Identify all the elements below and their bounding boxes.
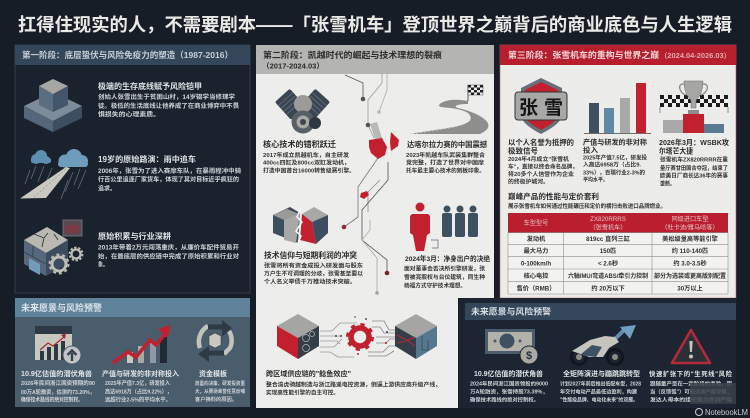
comparison table: 发动机 [527,235,546,243]
item: full matrix: "性能级品牌、电动化未来"的双雁。 [560,396,638,404]
item: belief versus profit: 张雪将所有资金成投入研发面与股东 [264,262,363,270]
item: walking away: 面对董事会否决所引擎研发，张 [404,264,485,272]
icon: rain and road [20,149,88,199]
table heading: 展示张雪机车如何通过性能碾压和定价的横扫击败进口品牌燃业。 [508,202,666,210]
item: personal reputation: 车"，直接以终会命名品牌， [508,162,578,170]
item: rain chase: 追求。 [98,184,116,192]
item: early accumulation: 始，在最底层的供应链中完成了原始积累和行业对 [98,252,239,260]
item: output and research: 产值与研发的非对称投入 [102,369,179,378]
stage three header [500,45,736,65]
comparison table: （张雪机车） [589,224,627,232]
item: capital template [195,369,245,403]
comparison table: 车型型号 [524,219,548,227]
item: asymmetric investment: 33%），百瑞行业2-3%的 [583,168,645,176]
item: core technology [263,139,355,174]
icon: motorcycle and arrow [572,325,636,364]
item: personal reputation: 的终极护城河。 [508,178,549,186]
icon: stacked block [24,79,82,132]
comparison table: 30万以上 [677,284,703,292]
item: core technology: 400cc四缸及800cc双缸发动机， [263,158,350,166]
item: core technology: 2017年成立凯越机车，自主研发 [263,151,349,159]
item: WSBK victory: 尔塔芒大捷 [659,146,693,156]
left vision header [15,298,250,317]
icon: red fragments [360,122,399,199]
panel: stage one [15,45,250,293]
item: core technology: 核心技术的错积跃迁 [263,139,336,149]
item: full matrix: 年交付电动产品最低边盈利，构建 [560,388,638,396]
item: output and research: 2025年产值7.3亿，研发投入 [105,379,170,387]
item: personal reputation: 2024年4月成立"张雪机 [508,155,569,163]
item: dakar: 达喀尔拉力赛的中国震撼 [407,140,488,149]
item: WSBK victory: 垄断。 [660,180,675,188]
icon: cycle arrows [198,320,232,362]
item: early accumulation [98,231,239,268]
item: walking away: 杨福方式守护技术理想。 [404,282,466,290]
comparison table [508,213,728,294]
icon: supply chain cubes and gear [277,314,437,359]
stage two header [256,45,494,74]
comparison table: 同级进口车型 [671,215,709,223]
comparison table: 售价（RMB） [517,284,555,292]
comparison table: 六轴IMU/弯道ABS/牵引力控制 [568,272,648,280]
panel: stage three [500,45,736,298]
item: valuation, right [470,369,548,404]
item: belief versus profit: 万户生不可调理的分歧，张雪甚至要以 [264,270,363,278]
item: survival baseline [98,81,240,118]
comparison table: < 2.6秒 [598,260,618,268]
item: asymmetric investment: 入高达6958万（占比9. [583,160,641,168]
item: output and research: 远超行业2-5%的平均水平。 [105,396,171,404]
stage one header: 第一阶段：底层蛰伏与风险免疫力的塑造（1987-2016） [22,50,233,60]
icon: v-twin engine [275,89,330,134]
stage three header: 第三阶段：张雪机车的重构与世界之巅 [508,50,660,60]
item: valuation: 确保技术路线的绝对控制权。 [21,396,83,404]
right vision header: 未来愿景与风险预警 [471,306,551,316]
item: WSBK victory: 张雪机车ZX820RRRR在重 [660,156,728,164]
item: output and research [102,369,179,404]
stage one header [15,45,250,65]
comparison table: 150匹 [600,248,616,255]
item: personal reputation [508,138,578,186]
stage two header: 第二阶段：凯越时代的崛起与技术理想的裂痕 [263,50,443,60]
item: full matrix: 计划2027年前后推出低配车型，2028 [560,380,641,388]
item: lifeline risk: 当（反馈弧"）可能造成产能受限， [650,388,732,396]
item: rain chase: 行百公里追逐厂家货车，体现了其对目标近乎疯狂的 [98,176,239,184]
item: personal reputation: 以个人名誉为抵押的 [508,138,574,147]
item: WSBK victory: 欧美日厂商长达36年的赛事 [660,172,728,180]
comparison table: ZX820RRRS [590,216,626,223]
comparison table: 核心电控 [524,272,549,280]
icon: name shield [515,78,567,134]
item: WSBK victory: 量厅赛甘田国合夺冠，结束了 [660,164,728,172]
item: asymmetric investment: 平均水平。 [583,176,608,184]
item: full matrix [560,369,641,404]
item: rain chase [98,154,241,192]
item: personal reputation: 极致信号 [508,146,538,156]
item: valuation, right: 万A轮融资，张雪持股73.39%， [470,388,548,396]
title: 扛得住现实的人，不需要剧本——「张雪机车」登顶世界之巅背后的商业底色与人生逻辑 [18,14,732,35]
item: valuation: 2026年民间浙江国资预期的90 [21,379,95,387]
item: catfish effect: 跨区域供应链的"鲶鱼效应" [266,369,351,378]
icon: warning triangle [672,330,710,363]
icon: growth chart window [35,326,81,364]
item: survival baseline: 徒。极低的生活底线让他养成了在商业博弈中不畏 [98,102,240,110]
stage two header: （2017-2024.03） [262,62,324,70]
item: valuation: 10.9亿估值的潜伏角兽 [21,369,92,378]
item: capital template: 放量的决策、研发投资重 [195,380,245,387]
blurred patch [690,383,736,404]
item: belief versus profit [264,250,363,286]
item: belief versus profit: 技术信仰与短期利润的冲突 [264,250,357,260]
table heading: 巅峰产品的性能与定价套利 [508,191,599,201]
item: valuation, right: 10.9亿估值的潜伏角兽 [474,369,543,378]
item: lifeline risk [649,369,733,404]
item: catfish effect: 整合渝虎骑越制造与浙江路遥电控资源，倒逼上游供应商升级产线， [266,380,441,388]
item: rain chase: 19岁的原始路演：雨中追车 [98,154,196,164]
item: lifeline risk: 快速扩张下的"生死线"风险 [649,369,733,378]
icon: trophy on podium [660,81,728,133]
icon: checkered flag and road [410,85,488,134]
icon: banknote and coin: $ [526,350,532,362]
icon: rising red arrow [113,325,170,363]
item: early accumulation: 象。 [98,260,108,268]
comparison table: 美松级量高等能引擎 [662,235,718,243]
item: core technology: 打造中国首台16000转售级赛引擎。 [263,166,355,174]
item: output and research: 高达6918万（占比9.22%）， [105,388,172,396]
comparison table: 约 110-140匹 [672,247,708,255]
item: early accumulation: 原始积累与行业深耕 [98,231,171,241]
item: rain chase: 2006年，张雪为了进入赛摩车队，在暴雨程冲中骑 [98,167,241,175]
item: lifeline risk: 发达人母本的组织能力受到严峻 [650,396,733,404]
item: full matrix: 全矩阵演进与蹦跳跳转型 [563,369,640,378]
item: survival baseline: 创始人张雪出生于贫困山村，14岁辍学当修理学 [98,93,235,101]
item: walking away [404,254,490,290]
item: survival baseline: 极端的生存底线赋予风险铠甲 [98,81,202,91]
panel: vision and risk, left [15,298,250,407]
item: capital template: 大，从赛场荣誉任意反哺 [195,388,245,395]
comparison table: （杜卡迪/雅马哈等） [661,224,719,232]
comparison table: 最大马力 [524,247,548,255]
item: valuation: 00万A轮融资，估测约73.20%， [21,388,95,396]
table heading [508,191,666,210]
item: walking away: 2024年3月：净身出户的决绝 [405,254,490,263]
right vision header [465,303,736,320]
left vision header: 未来愿景与风险预警 [21,302,102,313]
icon: name shield: 张 雪 [519,97,563,119]
circuit lines [342,73,389,295]
item: lifeline risk: 跟随量产是在一定阶段的考验，因 [650,380,732,388]
icon: split cube [273,207,328,244]
comparison table: 819cc 直列三缸 [586,235,630,243]
item: catfish effect [266,369,441,396]
item: capital template: 资金模板 [199,369,227,378]
comparison table: 部分为选装或更高版别配置 [654,272,726,280]
item: dakar: 托车最主要心技术的刻板印象。 [406,166,485,174]
icon: red person and board group [410,202,478,251]
item: dakar: 竞完整，打造了世界对中国摩 [406,158,484,166]
panel: vision and risk, right [459,298,736,408]
item: catfish effect: 实现高性能引擎的自主可控。 [266,388,339,396]
comparison table: 约 20万以下 [591,284,625,292]
panel: stage two [256,45,494,408]
item: valuation [21,369,95,404]
stage three header: （2024.04-2026.03） [660,52,731,60]
item: WSBK victory: 2026年3月：WSBK攻 [659,138,730,147]
item: personal reputation: 将20多个人信誉作为企业 [508,170,574,178]
item: asymmetric investment: 产值与研发的非对称 [583,138,647,146]
item: valuation, right: 2024年民间浙江国资领投的9000 [470,380,548,388]
item: dakar: 2023年凯越车队武装集群整合 [406,151,485,159]
item: WSBK victory [659,138,730,188]
comparison table: 0-100km/h [521,260,551,268]
comparison table: 约 3.0-3.5秒 [673,260,707,268]
item: asymmetric investment: 2025年产值7.5亿，研发投 [583,154,647,162]
item: valuation, right: 确保技术路线的绝对控制权。 [470,396,539,404]
bar chart: output and research [584,83,651,134]
item: survival baseline: 惧损失的心理素质。 [98,110,160,118]
item: asymmetric investment: 投入 [583,146,598,154]
icon: banknote and coin [485,329,538,364]
item: early accumulation: 2013年带着2万元闯荡重庆，从廉价车配件贸易开 [98,244,239,252]
item: walking away: 雪被亮股权与台位建筑，同生种 [404,273,485,281]
item: capital template: 客户换料的原因。 [195,396,237,403]
item: dakar [406,140,488,174]
item: asymmetric investment [583,138,647,184]
item: belief versus profit: 个人名义举债千万推动技术突破。 [264,278,356,286]
icon: cracked cube and gears [24,220,82,276]
